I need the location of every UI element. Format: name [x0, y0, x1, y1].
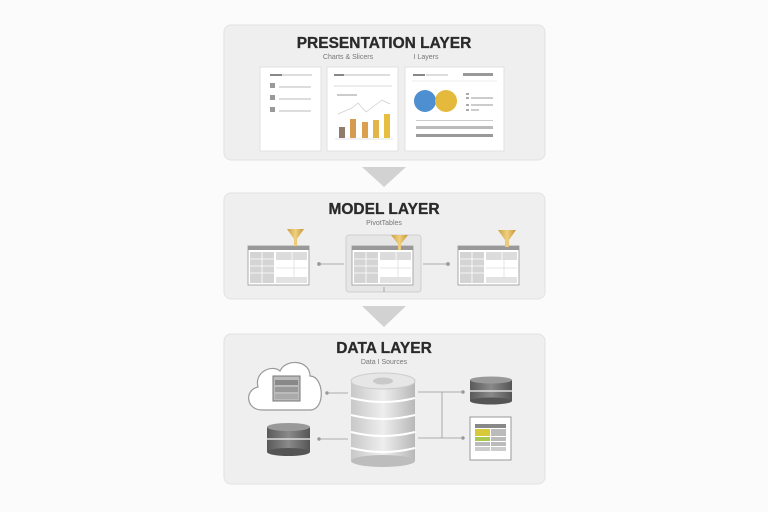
panel: data layer: [224, 334, 545, 484]
connectors: central to left: [318, 392, 348, 440]
icon: database right: [470, 376, 512, 404]
highlight box: [346, 235, 421, 292]
title: data layer: DATA LAYER: [336, 340, 432, 357]
title: model layer: MODEL LAYER: [328, 201, 440, 218]
card: bar chart: [327, 67, 398, 151]
subtitle: data sources: Data I Sources: [361, 359, 408, 366]
connectors: central to right: [418, 391, 464, 439]
subtitle: charts & slicers: Charts & Slicers: [323, 54, 374, 61]
title: presentation layer: PRESENTATION LAYER: [297, 35, 471, 52]
funnel left: [287, 229, 304, 246]
subtitle: pivottables: PivotTables: [366, 220, 402, 227]
arrow: model to data: [362, 306, 406, 327]
icon: database left: [267, 423, 310, 456]
pivot table right: [458, 246, 519, 285]
icon: central database: [351, 373, 415, 467]
connector: below center table: [383, 287, 385, 292]
panel: presentation layer: [224, 25, 545, 160]
arrow: center to left: [318, 262, 344, 266]
arrow: center to right: [423, 262, 450, 266]
card: slicer list: [260, 67, 321, 151]
pivot table left: [248, 246, 309, 285]
arrow: presentation to model: [362, 167, 406, 187]
icon: spreadsheet: [470, 417, 511, 460]
icon: cloud server: [249, 362, 321, 410]
card: pie charts: [405, 67, 504, 151]
subtitle: layers: I Layers: [414, 54, 439, 61]
funnel right: [498, 230, 516, 247]
funnel center: [391, 235, 408, 250]
panel: model layer: [224, 193, 545, 299]
pivot table center: [352, 246, 413, 285]
